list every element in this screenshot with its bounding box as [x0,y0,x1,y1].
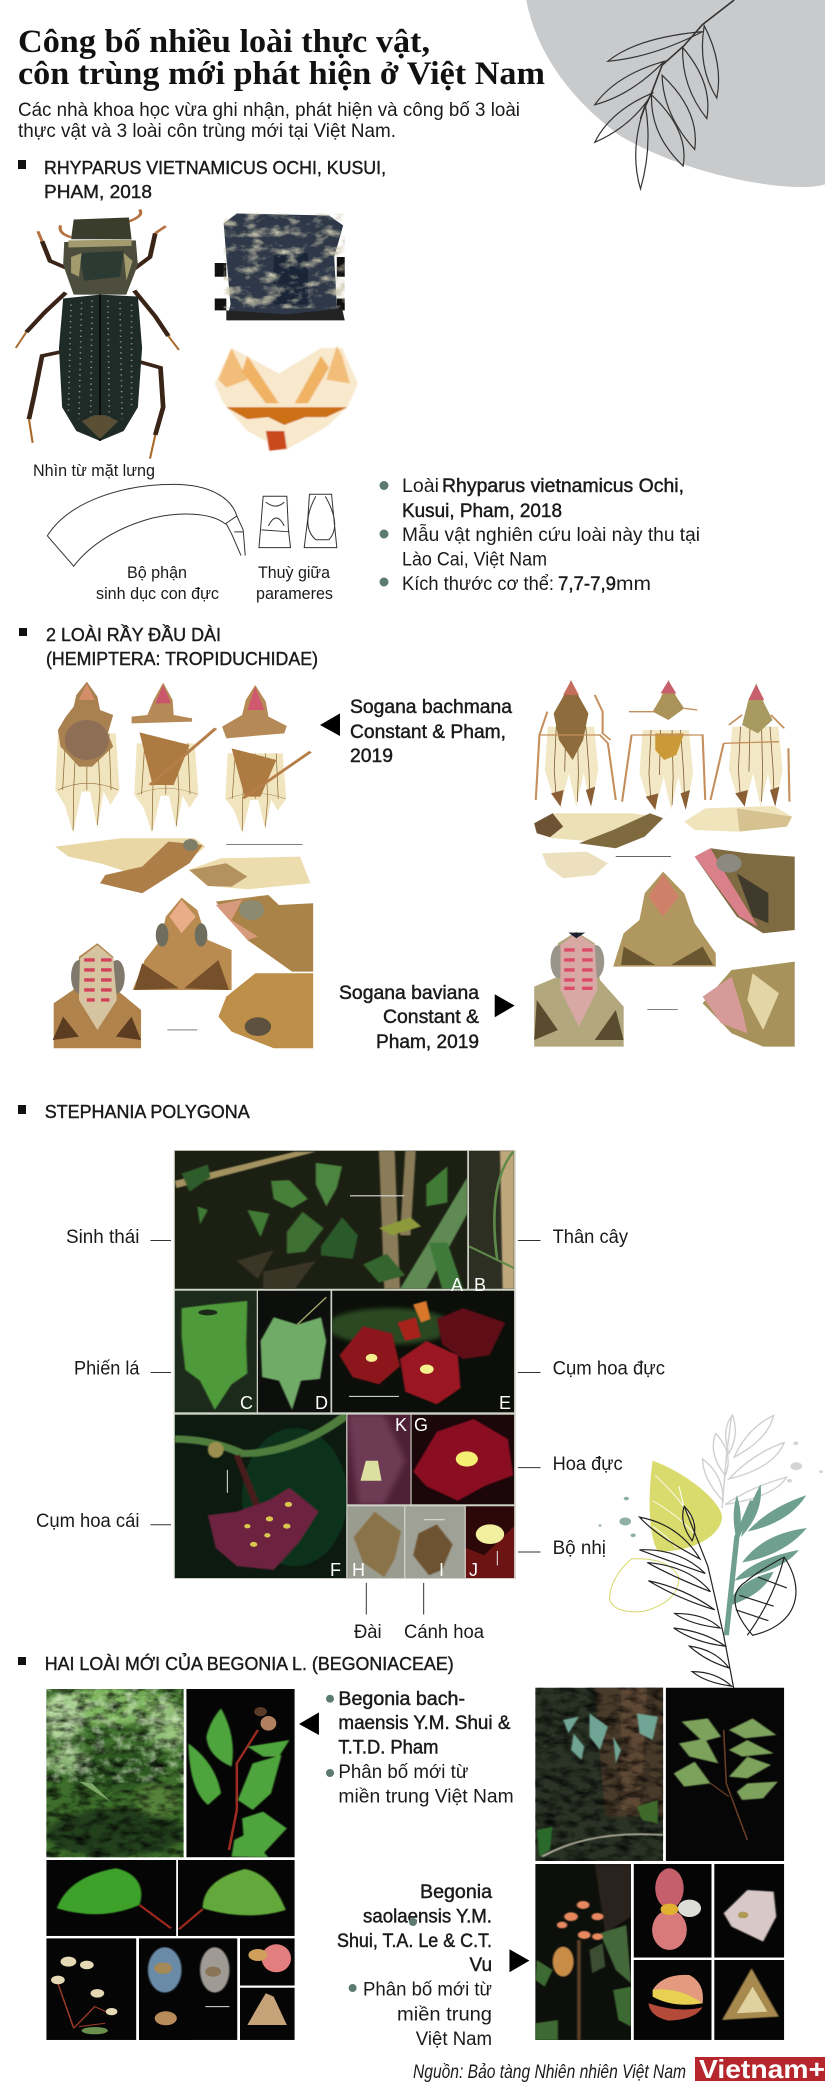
photo: pronotum close-up [215,214,345,320]
label: Sogana baviana: Pham, 2019 [376,1032,479,1053]
specimen C [222,685,311,833]
section heading: Rhyparus [18,157,386,202]
panel F female inflorescence [174,1414,346,1578]
leader lines [151,1240,541,1615]
specimen D [534,813,663,848]
panel D flower [634,1864,712,1958]
bullet list: Rhyparus facts: mm [616,574,651,595]
text: Begonia saolaensis: miền trung [397,2005,492,2026]
panel D leaf [178,1860,295,1936]
text: Begonia saolaensis [337,1882,492,2050]
text: Begonia bachmaensis: T.T.D. Pham [338,1738,438,1759]
panel letters: J [469,1560,478,1580]
label: Sogana baviana: Constant & [383,1007,479,1028]
panel F flower side [634,1960,712,2040]
panel F flowers [139,1938,238,2040]
plate labels: Sinh thái [66,1227,140,1248]
drawing: male genitalia outline [47,484,245,566]
bullet list: Rhyparus facts: 7,7-7,9 [558,574,616,595]
bullet list: Rhyparus facts: Kusui, Pham, 2018 [402,501,562,522]
photo plate: Stephania polygona [151,1150,541,1615]
panel letters: G [414,1415,428,1435]
plate labels: Cụm hoa cái [36,1511,140,1532]
label: Sogana baviana [339,983,479,1053]
logo: Vietnam+: Vietnam+ [699,2054,825,2084]
intro text: Các nhà khoa học vừa ghi nhận, phát hiện và công bố 3 loài [18,100,520,121]
intro text [18,100,520,142]
panel C flowering plant [535,1864,631,2040]
text: Begonia bachmaensis: Phân bố mới từ [338,1762,469,1783]
title [18,24,545,92]
panel B stem [468,1150,514,1289]
label: Sogana bachmana: Constant & Pham, [350,722,506,743]
panel letters: F [330,1560,341,1580]
label: Sogana bachmana: 2019 [350,746,393,767]
photo plate: Begonia saolaensis [535,1688,784,2040]
panel letters: B [474,1275,486,1295]
plate labels: Cụm hoa đực [553,1359,665,1380]
plate labels: Thân cây [553,1227,628,1248]
caption: genitalia: Bộ phận [127,563,187,582]
panel G [139,2011,191,2040]
caption: parameres [256,563,333,603]
panel letters: H [352,1560,365,1580]
bullet list: Rhyparus facts: Loài [402,476,439,497]
specimen I [218,973,313,1048]
panel J stamen [466,1506,514,1578]
specimen A [536,680,616,807]
bullet list: Rhyparus facts [380,476,700,595]
panel letters: A [451,1275,463,1295]
text: Begonia saolaensis: saolaensis Y.M. [363,1907,492,1928]
bullet list: Rhyparus facts: Mẫu vật nghiên cứu loài này thu tại [402,524,700,546]
plate labels: Cánh hoa [404,1622,484,1643]
panel letters: K [395,1415,407,1435]
panel letters: D [315,1393,328,1413]
scale bar [226,843,303,845]
text: Begonia saolaensis: Vu [470,1955,492,1976]
panel B branch [666,1688,784,1861]
section heading: Stephania: STEPHANIA POLYGONA [45,1101,250,1122]
specimen C [711,683,789,807]
specimen B [622,680,705,810]
panel letters: C [240,1393,253,1413]
panel G fruit [714,1960,784,2040]
section heading: Rhyparus: RHYPARUS VIETNAMICUS OCHI, KUSUI, [44,157,386,178]
caption: genitalia: sinh dục con đực [96,584,219,603]
bullet list: Rhyparus facts: Kích thước cơ thể: [402,574,554,595]
section heading: planthoppers [19,624,318,669]
specimen D side view [55,838,205,893]
title: Công bố nhiều loài thực vật, [18,24,430,60]
photo plate: Sogana bachmana [53,682,313,1048]
plate labels [36,1227,665,1643]
specimen E wing [188,857,311,889]
caption: dorsal view: Nhìn từ mặt lưng [33,461,155,480]
specimen H [216,895,313,972]
drawing: parameres [259,494,337,548]
specimen F [53,943,141,1048]
specimen J [703,962,795,1047]
panel B branch [186,1689,295,1858]
text: Begonia saolaensis: Begonia [420,1882,492,1903]
intro text: thực vật và 3 loài côn trùng mới tại Việt Nam. [18,121,396,142]
arrow: left to Sogana bachmana [320,713,340,736]
panel D leaf [258,1290,330,1412]
photo plate: Sogana baviana [534,680,795,1047]
specimen A [55,682,119,833]
section heading: Rhyparus: PHAM, 2018 [44,181,152,202]
label: Sogana bachmana: Sogana bachmana [350,697,512,718]
arrow: left to Begonia bachmaensis [299,1712,319,1735]
specimen G [133,898,232,990]
specimen I [613,872,716,967]
label: Sogana baviana: Sogana baviana [339,983,479,1004]
panel I petal [405,1506,465,1578]
arrow: right to Begonia saolaensis [509,1949,529,1972]
panel A forest [535,1688,664,1861]
section heading: planthoppers: (HEMIPTERA: TROPIDUCHIDAE) [46,648,318,669]
photo plate: Begonia bachmaensis [42,1688,295,2040]
panel letters: I [439,1560,444,1580]
text: Begonia saolaensis: Việt Nam [416,2029,492,2050]
panel H sepal [348,1506,404,1578]
panel K [347,1414,410,1504]
text: Begonia bachmaensis: maensis Y.M. Shui & [338,1713,511,1734]
text: Begonia saolaensis: Shui, T.A. Le & C.T. [337,1931,492,1952]
plate labels: Phiến lá [74,1359,140,1380]
photo: genitalia specimen [215,346,358,451]
photo: beetle dorsal view [16,210,179,459]
plate labels: Hoa đực [553,1454,623,1475]
panel A habitat [174,1150,468,1289]
specimen F wing [542,852,608,878]
arrow: right to Sogana baviana [495,994,515,1017]
panel H [240,1938,295,1986]
text: Begonia bachmaensis: miền trung Việt Nam [338,1787,514,1808]
label: Sogana bachmana [350,697,512,767]
title: côn trùng mới phát hiện ở Việt Nam [18,56,545,92]
plate labels: Bộ nhị [553,1538,606,1559]
section heading: Begonia: HAI LOÀI MỚI CỦA BEGONIA L. (BEGONIACEAE) [45,1653,454,1674]
specimen H [534,932,624,1047]
caption: parameres: Thuỳ giữa [258,563,331,582]
section heading: planthoppers: 2 LOÀI RẦY ĐẦU DÀI [46,624,221,645]
caption: parameres: parameres [256,584,333,603]
panel E male inflorescence [332,1290,514,1412]
text: Begonia bachmaensis [326,1689,514,1808]
caption: genitalia [96,563,219,603]
text: Begonia bachmaensis: Begonia bach- [338,1689,465,1710]
panel letters: E [499,1393,511,1413]
source credit: Nguồn: Bảo tàng Nhiên nhiên Việt Nam [413,2062,686,2083]
plate labels: Đài [354,1622,382,1643]
specimen G [695,848,795,933]
bullet list: Rhyparus facts: Lào Cai, Việt Nam [402,550,547,570]
text: Begonia saolaensis: Phân bố mới từ [363,1980,492,2001]
panel letters [240,1275,511,1580]
specimen B [132,683,216,833]
icon: leafy branch [595,0,734,189]
panel A forest [46,1689,184,1858]
bullet list: Rhyparus facts: Rhyparus vietnamicus Ochi, [442,476,684,497]
decorative plant illustration [598,1415,823,1691]
panel E inflorescence [46,1938,136,2040]
panel I [240,1988,295,2040]
background blob [526,0,825,187]
panel E flower [714,1864,784,1958]
specimen E wing [684,806,792,832]
panel C leaf [46,1860,176,1936]
panel G male flower [412,1414,514,1504]
panel C leaf [174,1290,257,1412]
